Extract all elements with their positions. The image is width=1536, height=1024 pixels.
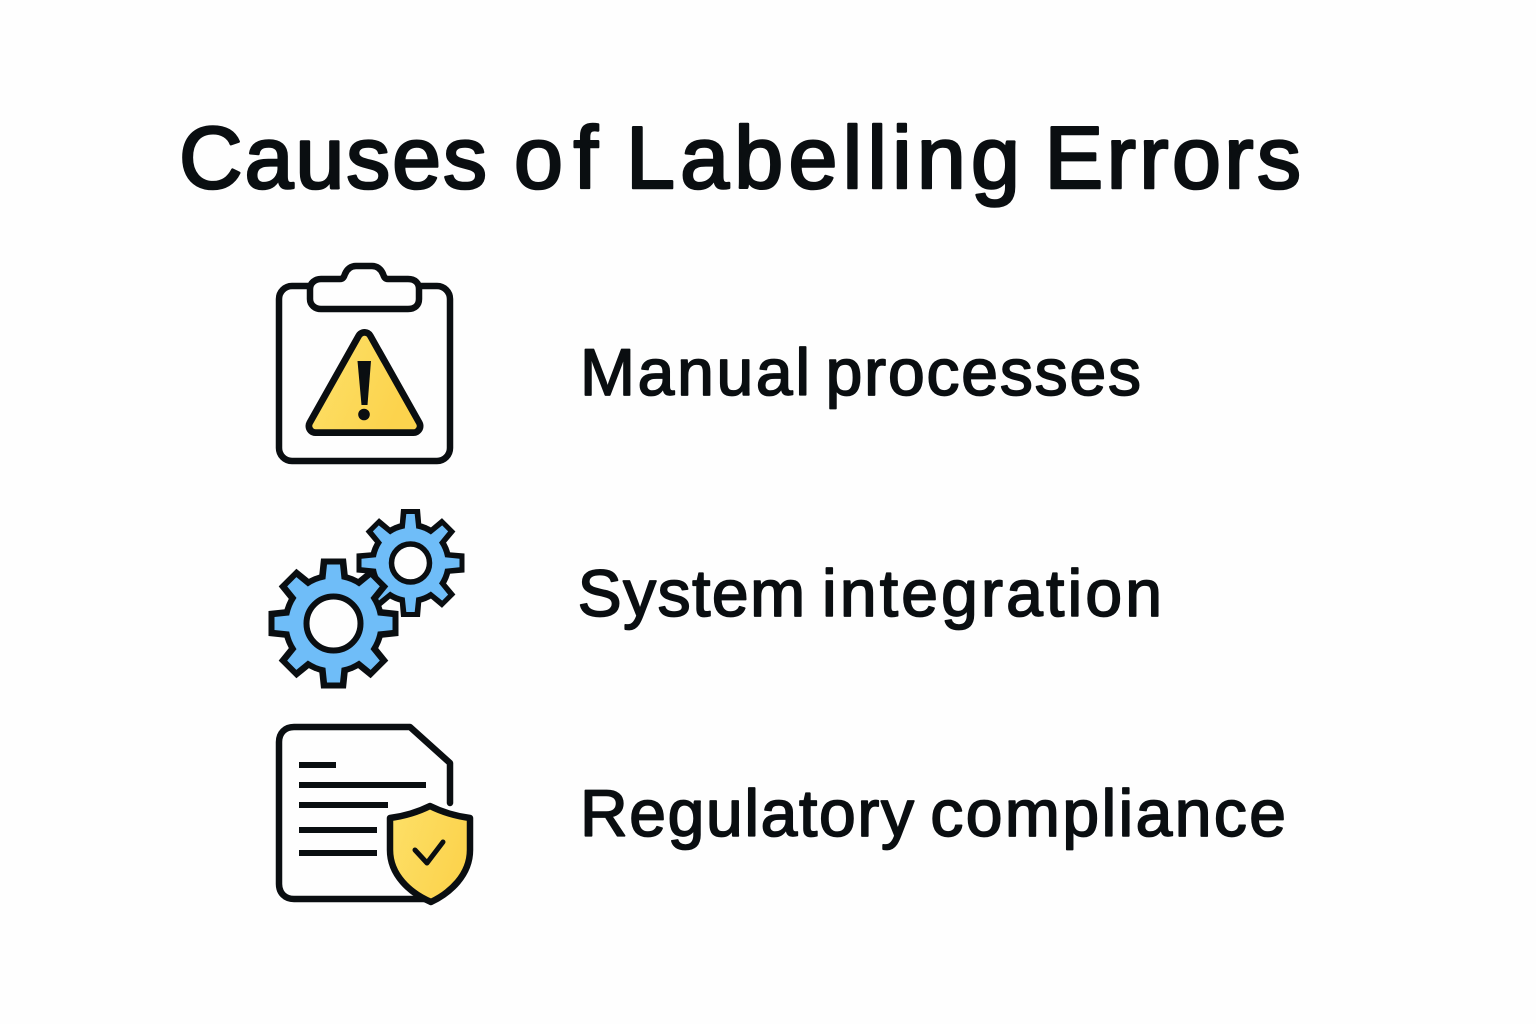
- title: of: [514, 108, 599, 207]
- title: Errors: [1044, 108, 1301, 207]
- title: [179, 108, 1301, 207]
- check mark: [415, 842, 443, 863]
- title: Labelling: [626, 108, 1020, 207]
- label: system integration: integration: [822, 556, 1162, 630]
- icon: gears: [268, 509, 464, 688]
- document text lines: [299, 765, 426, 853]
- label: regulatory compliance: Regulatory: [580, 776, 914, 850]
- label: manual processes: [580, 335, 1141, 409]
- title: Causes: [179, 108, 487, 207]
- icon: document with shield: [279, 727, 470, 902]
- clipboard board: [279, 286, 450, 461]
- item: system integration: [268, 509, 1162, 688]
- large gear: [268, 558, 398, 688]
- shield: [390, 806, 470, 902]
- label: manual processes: processes: [826, 335, 1141, 409]
- icon: clipboard with warning triangle: [279, 266, 450, 461]
- label: system integration: System: [578, 556, 805, 630]
- item: manual processes: [279, 266, 1141, 461]
- clipboard clip: [310, 266, 419, 309]
- warning triangle: [316, 339, 414, 426]
- label: manual processes: Manual: [580, 335, 810, 409]
- label: regulatory compliance: compliance: [930, 776, 1286, 850]
- item: regulatory compliance: [279, 727, 1286, 902]
- label: regulatory compliance: [580, 776, 1286, 850]
- document outline: [279, 727, 450, 899]
- small gear: [356, 509, 464, 617]
- label: system integration: [578, 556, 1162, 630]
